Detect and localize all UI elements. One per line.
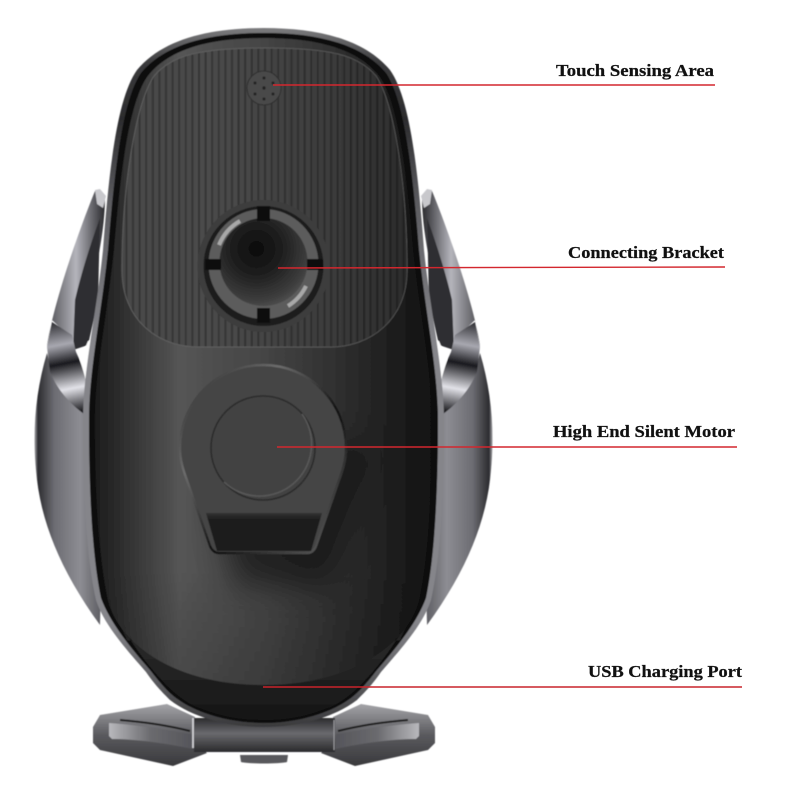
bottom lip (USB port) bbox=[107, 596, 420, 720]
left foot bbox=[93, 704, 207, 766]
phone holder product illustration bbox=[34, 28, 493, 766]
right foot bbox=[321, 704, 435, 766]
left side clamp arm bbox=[34, 189, 106, 625]
black inner frame bbox=[89, 33, 438, 723]
callout: Touch Sensing Area: Touch Sensing Area bbox=[556, 61, 714, 80]
motor cover shadow bbox=[215, 440, 365, 585]
callout: High End Silent Motor: High End Silent Motor bbox=[553, 422, 735, 441]
holder body outer shell bbox=[83, 28, 444, 727]
center bar bbox=[194, 718, 335, 752]
right side clamp arm bbox=[421, 189, 493, 625]
connecting bracket bbox=[198, 200, 330, 332]
main body panel bbox=[95, 38, 432, 685]
base feet and bar bbox=[93, 704, 435, 766]
high end silent motor cover bbox=[180, 365, 346, 553]
callout: USB Charging Port: USB Charging Port bbox=[588, 662, 743, 681]
touch sensing button bbox=[247, 71, 281, 105]
center nub bbox=[240, 755, 288, 764]
striped upper panel bbox=[122, 48, 407, 347]
callout: Connecting Bracket: Connecting Bracket bbox=[568, 243, 725, 262]
